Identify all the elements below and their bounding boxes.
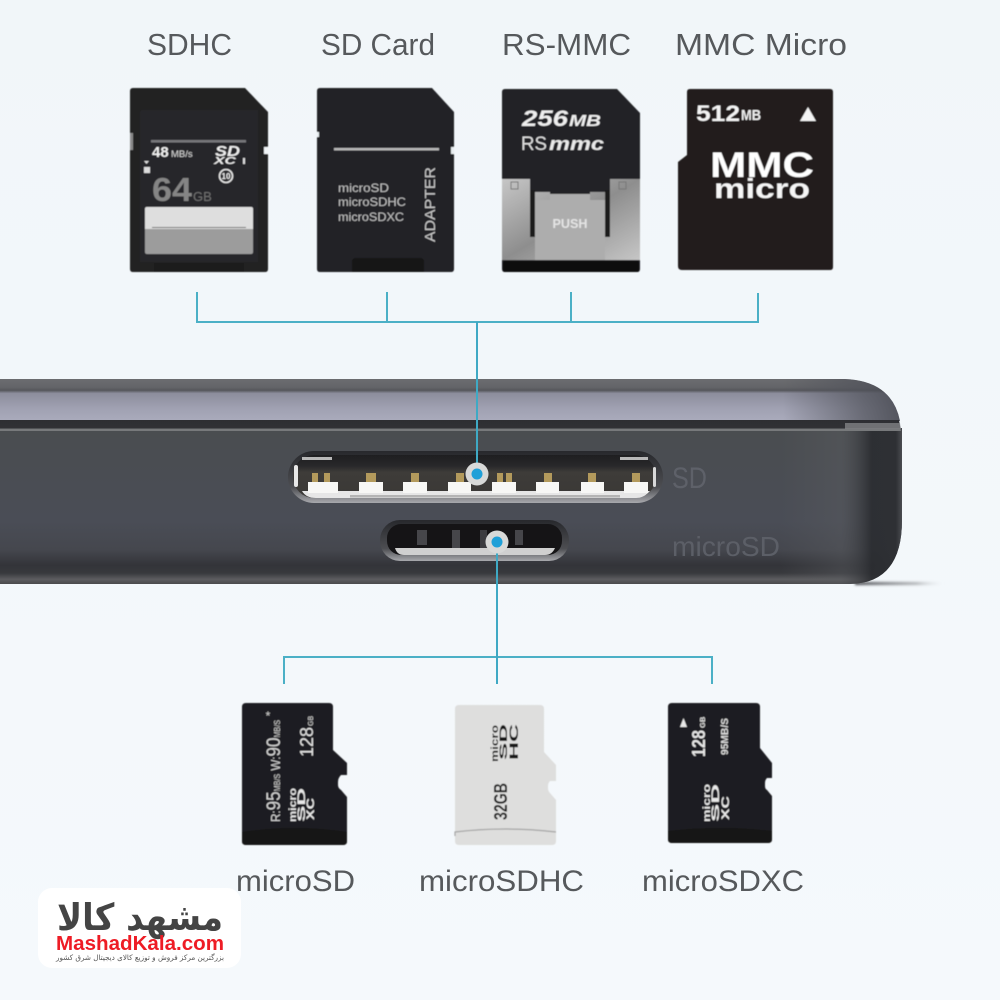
connector lines: full-size cards to bus <box>197 292 758 322</box>
card: RS-MMC 256MB <box>502 89 640 272</box>
card: microSD 128GB: SD <box>296 788 308 822</box>
card: SDHC 64 GB: MB/s <box>171 149 193 160</box>
logo: MashadKala.com: MashadKala.com <box>56 933 224 955</box>
label: SD Card: SD Card <box>321 27 435 62</box>
card: microSDXC 128GB: 128 <box>689 730 709 757</box>
device: card reader hub <box>0 379 943 585</box>
SD slot contacts <box>308 482 648 493</box>
card: SDHC 64 GB <box>130 88 268 272</box>
card: SD Card adapter: microSDHC <box>338 195 406 209</box>
card: microSD 128GB: GB <box>308 716 315 726</box>
card: microSDXC 128GB: 95MB/S <box>719 718 731 755</box>
device body <box>0 428 902 584</box>
connector dot: microSD slot <box>486 530 508 554</box>
card: microSDHC 32GB: HC <box>507 723 521 760</box>
card: MMC Micro 512MB <box>678 89 833 270</box>
connector dot: SD slot <box>466 462 488 486</box>
card: microSDHC 32GB: 32GB <box>491 783 511 820</box>
SD slot gold pins <box>312 473 640 482</box>
card: SDHC 64 GB: 64 <box>152 171 193 208</box>
card: MMC Micro 512MB: MMC <box>710 146 814 185</box>
slot label: SD: SD <box>672 462 707 495</box>
device top surface <box>0 379 900 421</box>
device shadow <box>855 582 943 585</box>
card: SD Card adapter: ADAPTER <box>423 167 439 242</box>
card: SD Card adapter <box>317 88 454 272</box>
card: microSDHC 32GB: SD <box>498 724 510 760</box>
card: SD Card adapter: microSDXC <box>338 210 404 224</box>
label: RS-MMC: RS-MMC <box>502 27 631 62</box>
card: SDHC 64 GB: 10 <box>222 172 231 181</box>
card: microSDXC 128GB: SD <box>710 784 722 822</box>
microSD slot <box>380 520 569 561</box>
logo: Persian tagline: بزرگترین مرکز فروش و توزیع کالای دیجیتال شرق کشور <box>55 953 224 962</box>
card: microSD 128GB: micro <box>288 788 299 822</box>
card: RS-MMC 256MB: RS <box>521 134 547 155</box>
card: MMC Micro 512MB: MB <box>741 107 761 124</box>
connector lines: microSD slot to micro cards <box>284 542 712 684</box>
SD slot <box>288 451 663 503</box>
card: microSDHC 32GB: micro <box>490 725 501 762</box>
card: RS-MMC 256MB: 256 <box>521 106 569 131</box>
card: microSD 128GB: 128 <box>297 727 317 757</box>
card: microSD 128GB: R:95MB/S W:90MB/S <box>264 720 285 822</box>
card: RS-MMC 256MB: PUSH <box>552 217 588 231</box>
connector stem: bus to SD slot <box>476 322 478 474</box>
label: SDHC: SDHC <box>147 27 232 62</box>
card: microSDXC 128GB: XC <box>720 796 732 820</box>
label: microSDHC: microSDHC <box>419 865 584 898</box>
card: SDHC 64 GB: XC <box>212 156 237 167</box>
watermark logo: MashadKala <box>38 888 241 968</box>
card: microSDXC 128GB: GB <box>698 716 707 728</box>
card: microSDXC 128GB: micro <box>702 784 713 822</box>
card: microSDXC 128GB <box>668 703 772 843</box>
card: microSDHC 32GB <box>455 705 556 845</box>
label group: micro card formats <box>236 865 804 898</box>
logo: Persian wordmark: مشهد کالا <box>57 896 223 939</box>
card: SDHC 64 GB: 48 <box>152 144 169 161</box>
card: SD Card adapter: microSD <box>338 181 389 195</box>
card: microSD 128GB <box>242 703 347 845</box>
card: MMC Micro 512MB: micro <box>714 173 810 204</box>
card: microSD 128GB: * <box>266 709 271 723</box>
label: microSDXC: microSDXC <box>642 865 804 898</box>
card: RS-MMC 256MB: MB <box>569 113 601 130</box>
card: MMC Micro 512MB: 512 <box>696 101 740 126</box>
card: microSD 128GB: XC <box>305 798 317 820</box>
card: RS-MMC 256MB: mmc <box>549 134 604 154</box>
heading labels: full-size card formats <box>147 27 847 62</box>
label: microSD: microSD <box>236 865 355 898</box>
card: SDHC 64 GB: GB <box>193 189 212 204</box>
card: SDHC 64 GB: SD <box>215 143 240 160</box>
device rim <box>0 420 901 431</box>
label: MMC Micro: MMC Micro <box>675 27 847 62</box>
slot label: microSD: microSD <box>672 531 780 562</box>
